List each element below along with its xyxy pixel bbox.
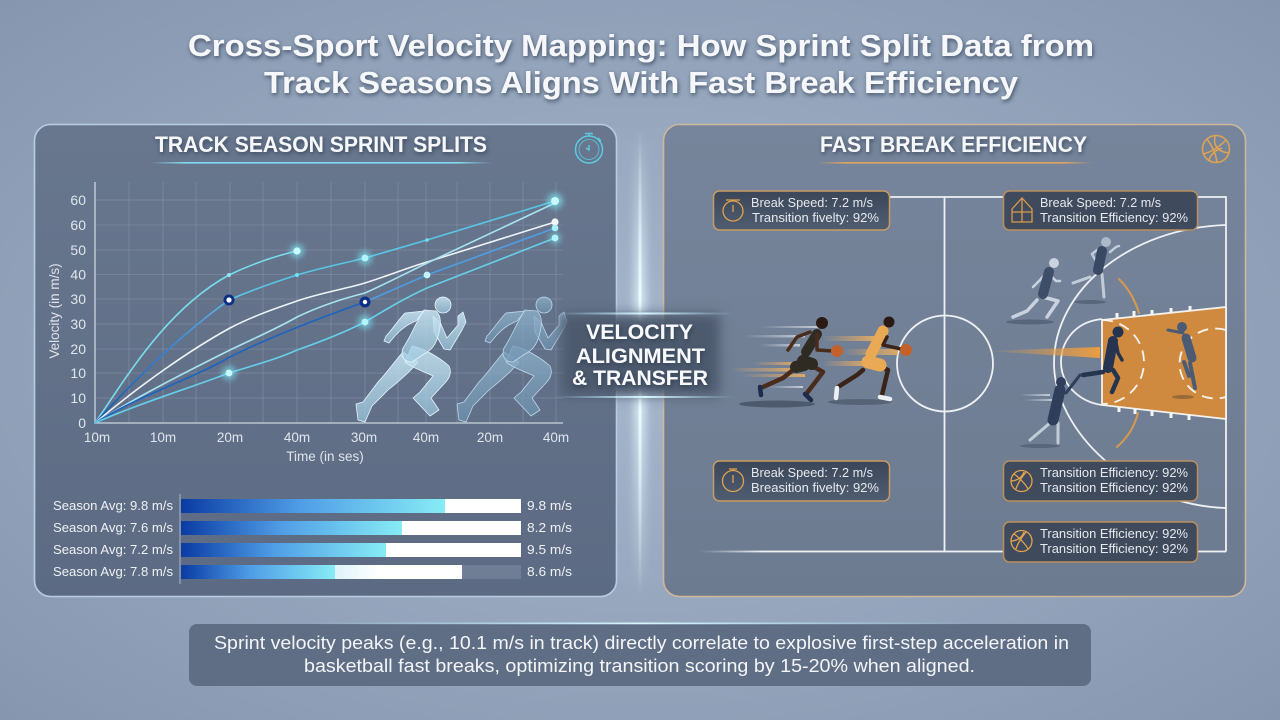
callout: lower right two — [1004, 522, 1198, 562]
panel: track season sprint splits — [34, 124, 616, 596]
player: defender upper left — [1006, 258, 1060, 324]
central glow beam — [634, 130, 646, 595]
y axis labels: 30 — [70, 316, 86, 332]
bar row 4 — [53, 564, 573, 579]
bar row 3: Season Avg: 7.2 m/s — [53, 542, 174, 557]
axis title: velocity: Velocity (in m/s) — [47, 263, 62, 359]
center label: velocity alignment and transfer — [555, 312, 735, 398]
callout: lower right one — [1004, 461, 1198, 501]
runner: front sprinter — [356, 297, 466, 422]
orange paint area — [985, 279, 1226, 447]
summary banner: Sprint velocity peaks (e.g., 10.1 m/s in track) directly correlate to explosive first-step acceleration in — [214, 632, 1069, 653]
x axis labels: 40m — [413, 430, 439, 445]
center label: velocity alignment and transfer: ALIGNMENT — [576, 344, 705, 368]
title: Cross-Sport Velocity Mapping: How Sprint Split Data from — [188, 28, 1094, 63]
title — [188, 28, 1094, 100]
heading: track season: TRACK SEASON SPRINT SPLITS — [155, 132, 487, 157]
line chart — [47, 182, 569, 464]
callout: lower right one: Transition Efficiency: 92% — [1040, 466, 1188, 480]
y axis labels: 60 — [70, 192, 86, 208]
icon: court house — [1012, 198, 1032, 222]
player: defender in paint — [1168, 322, 1195, 399]
bar row 3 — [53, 542, 573, 557]
bar row 2: Season Avg: 7.6 m/s — [53, 520, 174, 535]
axis title: time: Time (in ses) — [286, 449, 364, 464]
y axis labels: 0 — [78, 415, 86, 431]
x axis labels — [84, 430, 569, 445]
y axis labels: 10 — [70, 390, 86, 406]
season average bars — [53, 494, 573, 584]
bar row 2 — [53, 520, 573, 535]
basketball court lines — [700, 197, 1226, 552]
icon: basketball small — [1011, 470, 1032, 492]
summary banner: basketball fast breaks, optimizing transition scoring by 15-20% when aligned. — [304, 655, 975, 676]
y axis labels: 40 — [70, 266, 86, 282]
center label: velocity alignment and transfer: & TRANSFER — [572, 366, 708, 390]
callout: lower left: Breasition fivelty: 92% — [751, 481, 879, 495]
x axis labels: 10m — [150, 430, 176, 445]
x axis labels: 30m — [351, 430, 377, 445]
icon: basketball — [1202, 136, 1230, 162]
callout: lower right two: Transition Efficiency: 92% — [1040, 527, 1188, 541]
callout: upper right — [1004, 191, 1198, 230]
bar row 1: Season Avg: 9.8 m/s — [53, 498, 174, 513]
x axis labels: 40m — [284, 430, 310, 445]
player: navy attacker in paint — [1083, 326, 1124, 392]
callout: upper right: Transition Efficiency: 92% — [1040, 211, 1188, 225]
player: gold jersey dribbler — [828, 316, 912, 405]
icon: stopwatch — [576, 134, 602, 163]
bar row 3: 9.5 m/s — [527, 542, 573, 557]
icon: stopwatch small — [722, 469, 744, 492]
icon: basketball small two — [1011, 530, 1032, 552]
icon: watch — [723, 200, 743, 221]
center label: velocity alignment and transfer: VELOCITY — [586, 320, 693, 344]
velocity curves — [95, 201, 555, 423]
y axis labels: 20 — [70, 341, 86, 357]
speed streaks — [730, 326, 1055, 401]
callout: lower left — [714, 461, 890, 501]
bar row 1 — [53, 498, 573, 513]
callout: lower right two: Transition Efficiency: 92% — [1040, 542, 1188, 556]
callout: upper left — [714, 191, 890, 230]
y axis labels: 60 — [70, 217, 86, 233]
bar row 1: 9.8 m/s — [527, 498, 573, 513]
callout: upper left: Transition fivelty: 92% — [752, 211, 879, 225]
data points — [222, 193, 563, 380]
player: defender upper right — [1073, 237, 1119, 304]
panel: fast break efficiency — [664, 124, 1246, 596]
bar row 2: 8.2 m/s — [527, 520, 573, 535]
x axis labels: 40m — [543, 430, 569, 445]
callout: lower right one: Transition Efficiency: 92% — [1040, 481, 1188, 495]
summary banner — [189, 622, 1091, 686]
title: Track Seasons Aligns With Fast Break Efficiency — [264, 65, 1019, 100]
callout: upper right: Break Speed: 7.2 m/s — [1040, 196, 1161, 210]
y axis labels: 50 — [70, 242, 86, 258]
callout: upper left: Break Speed: 7.2 m/s — [751, 196, 873, 210]
y axis labels: 10 — [70, 365, 86, 381]
player: dark jersey dribbler — [739, 317, 843, 408]
bar row 4: 8.6 m/s — [527, 564, 573, 579]
player: defender lower — [1020, 375, 1080, 448]
bar row 4: Season Avg: 7.8 m/s — [53, 564, 174, 579]
callout: lower left: Break Speed: 7.2 m/s — [751, 466, 873, 480]
heading: fast break: FAST BREAK EFFICIENCY — [820, 132, 1087, 157]
x axis labels: 10m — [84, 430, 110, 445]
x axis labels: 20m — [477, 430, 503, 445]
y axis labels — [70, 192, 86, 431]
runner: rear sprinter — [457, 297, 567, 422]
y axis labels: 30 — [70, 291, 86, 307]
x axis labels: 20m — [217, 430, 243, 445]
